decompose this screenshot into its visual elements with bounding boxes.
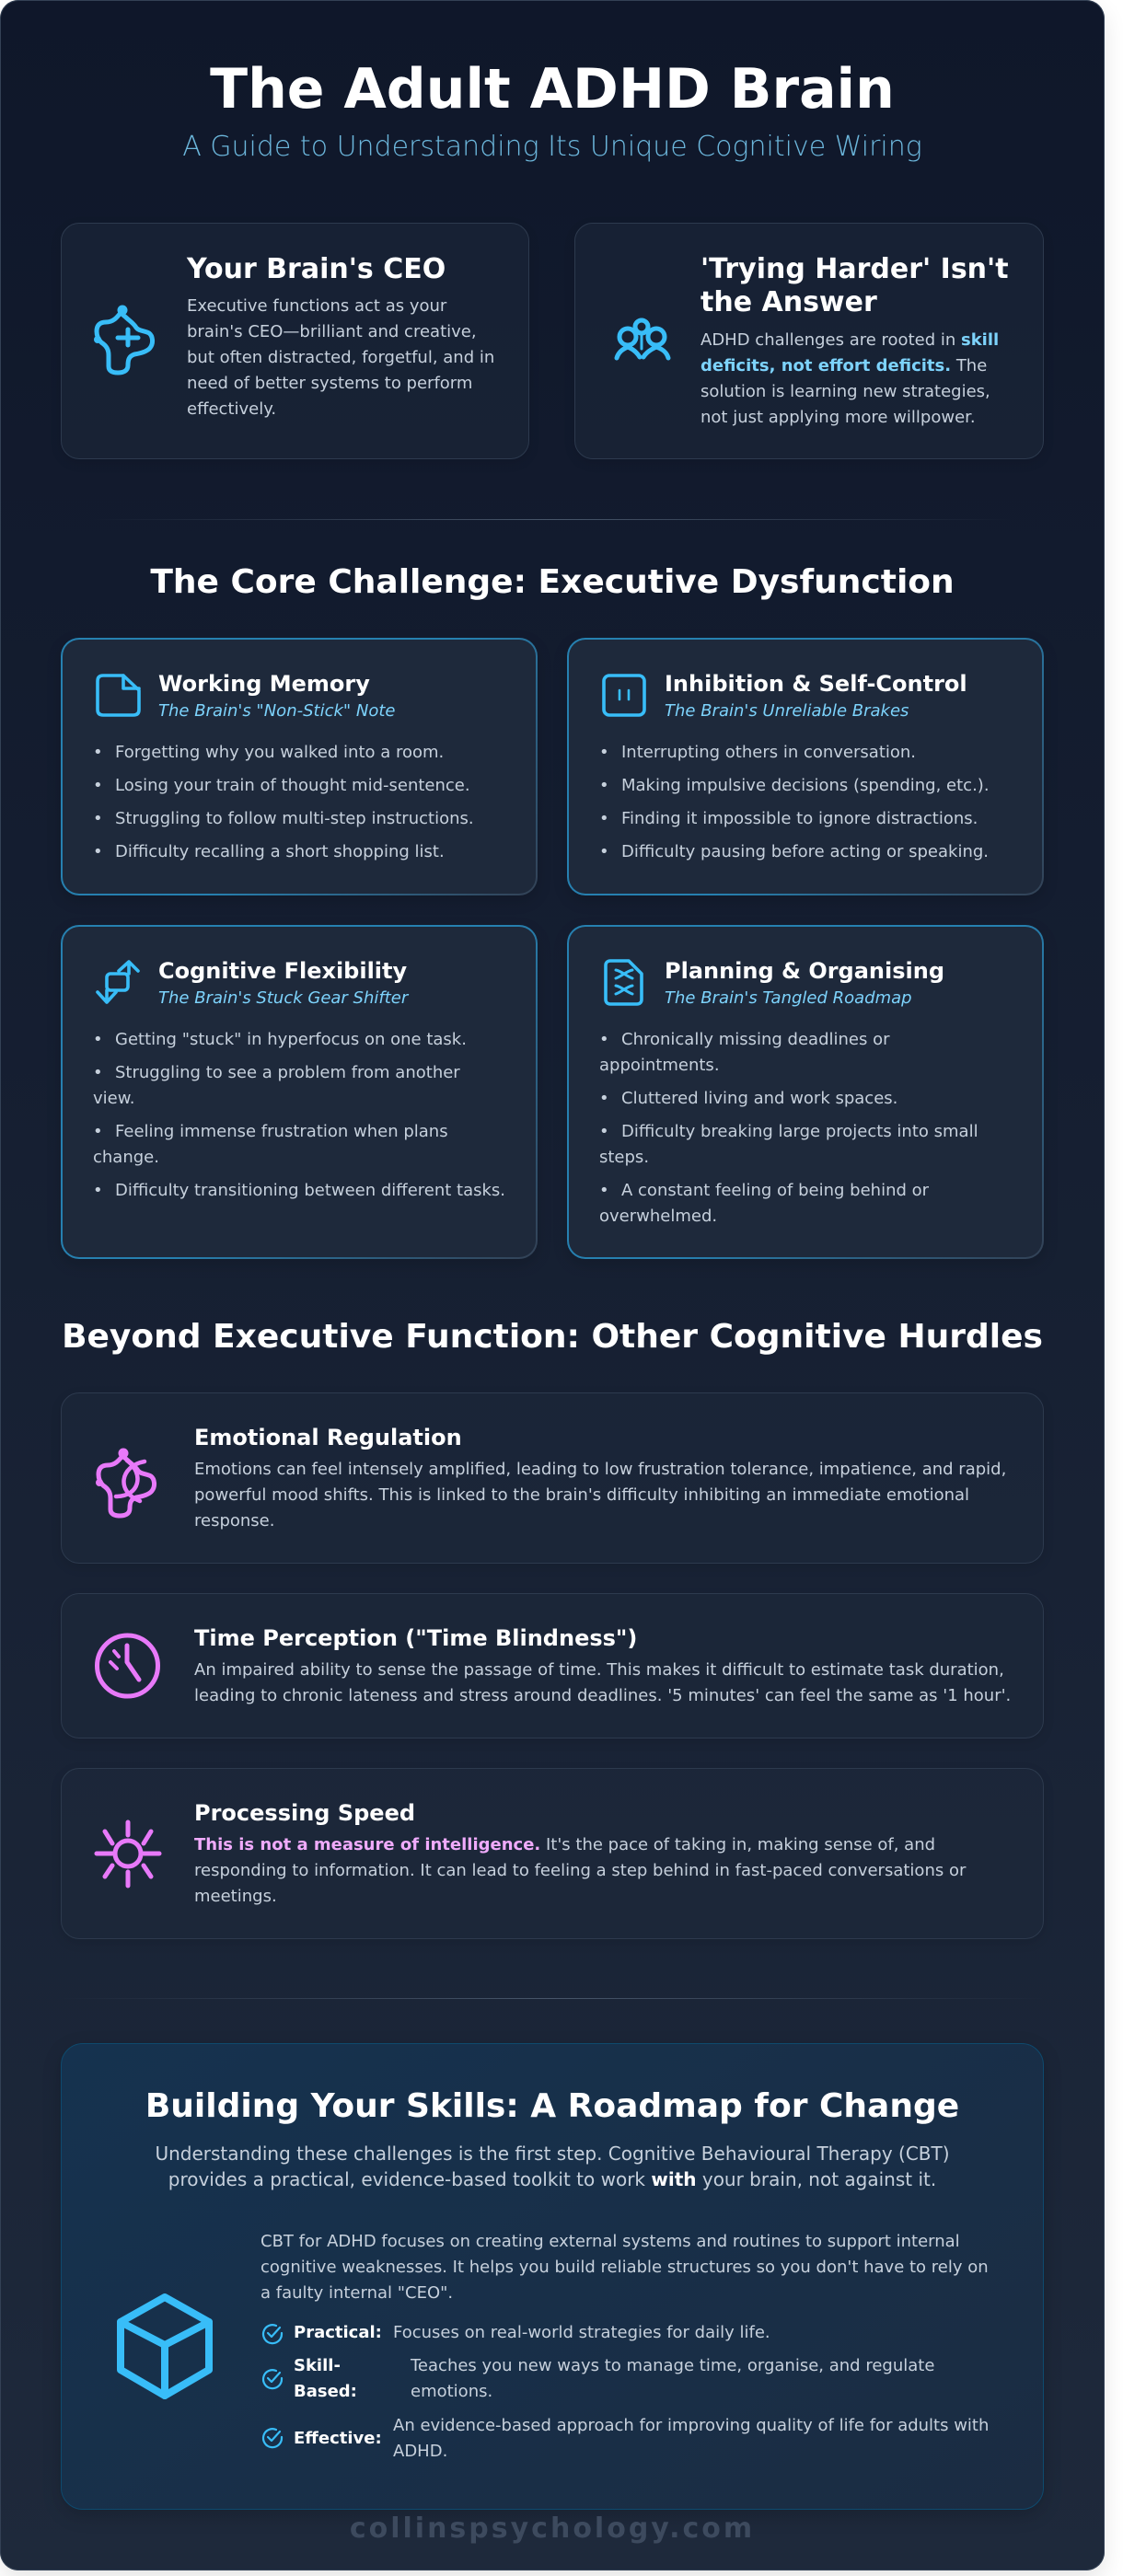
card text: need of better systems to perform <box>187 374 472 393</box>
divider <box>60 1998 1045 1999</box>
body text: CBT for ADHD focuses on creating external systems and routines to support internal <box>260 2232 960 2251</box>
card text: responding to information. It can lead to feeling a step behind in fast-paced conversations or <box>194 1861 966 1880</box>
card subheading: The Brain's Stuck Gear Shifter <box>158 988 408 1008</box>
panel intro <box>155 2143 950 2190</box>
label: Based: <box>294 2382 357 2401</box>
card text: ADHD challenges are rooted in skill <box>700 330 999 350</box>
card heading: Inhibition & Self-Control <box>665 671 967 697</box>
card heading: 'Trying Harder' Isn't <box>700 253 1009 285</box>
description: Focuses on real-world strategies for daily life. <box>393 2323 770 2342</box>
symptom list: steps. <box>599 1148 649 1167</box>
card text <box>187 296 494 419</box>
symptom list: A constant feeling of being behind or <box>621 1181 929 1200</box>
panel intro: Understanding these challenges is the first step. Cognitive Behavioural Therapy (CBT) <box>155 2143 950 2165</box>
symptom list: Getting "stuck" in hyperfocus on one task. <box>115 1030 467 1049</box>
symptom list <box>602 743 990 861</box>
description: Teaches you new ways to manage time, organise, and regulate <box>411 2356 934 2375</box>
symptom list: Finding it impossible to ignore distractions. <box>621 809 978 828</box>
icon: brain with lens <box>96 1449 156 1519</box>
label: Skill- <box>294 2356 341 2375</box>
icon: clock <box>95 1633 160 1699</box>
panel: time perception <box>61 1593 1044 1739</box>
symptom list: appointments. <box>599 1056 720 1075</box>
icon: cube <box>117 2293 213 2399</box>
panel: emotional regulation <box>61 1392 1044 1564</box>
icon: check <box>261 2369 284 2389</box>
icon: pause button <box>602 674 646 717</box>
card heading: Your Brain's CEO <box>187 253 446 285</box>
card heading: Emotional Regulation <box>194 1425 462 1450</box>
icon: three people <box>615 318 670 361</box>
benefit: effective <box>261 2416 989 2461</box>
description: emotions. <box>411 2382 492 2401</box>
symptom list: Struggling to follow multi-step instructions. <box>115 809 474 828</box>
symptom list: Difficulty transitioning between different tasks. <box>115 1181 505 1200</box>
card text: deficits, not effort deficits. The <box>700 356 987 375</box>
symptom list: overwhelmed. <box>599 1207 717 1226</box>
card text: An impaired ability to sense the passage of time. This makes it difficult to estimate task duration, <box>194 1660 1004 1680</box>
card text: Emotions can feel intensely amplified, leading to low frustration tolerance, impatience, and rapid, <box>194 1460 1006 1479</box>
symptom list <box>93 1030 505 1200</box>
card heading: Processing Speed <box>194 1800 415 1826</box>
symptom list: Cluttered living and work spaces. <box>621 1089 897 1108</box>
card text: not just applying more willpower. <box>700 408 976 427</box>
panel: processing speed <box>61 1768 1044 1939</box>
card heading: Working Memory <box>158 671 370 697</box>
symptom list: Making impulsive decisions (spending, etc.). <box>621 776 990 795</box>
card text: powerful mood shifts. This is linked to the brain's difficulty inhibiting an immediate emotional <box>194 1485 969 1505</box>
card text <box>700 330 999 427</box>
card subheading: The Brain's "Non-Stick" Note <box>158 701 396 721</box>
panel heading: Building Your Skills: A Roadmap for Change <box>145 2087 959 2125</box>
description <box>411 2356 934 2401</box>
card text: leading to chronic lateness and stress around deadlines. '5 minutes' can feel the same as '1 hour'. <box>194 1686 1011 1705</box>
subtitle: A Guide to Understanding Its Unique Cognitive Wiring <box>182 131 922 163</box>
card text: Executive functions act as your <box>187 296 446 316</box>
card text: but often distracted, forgetful, and in <box>187 348 494 367</box>
symptom list: Struggling to see a problem from another <box>115 1063 460 1082</box>
card text: response. <box>194 1511 274 1531</box>
body text <box>260 2232 989 2303</box>
card text <box>194 1835 967 1906</box>
symptom list: view. <box>93 1089 135 1108</box>
panel: working memory <box>61 638 538 895</box>
icon: sun <box>94 1820 162 1889</box>
card text: brain's CEO—brilliant and creative, <box>187 322 477 341</box>
card text <box>194 1660 1011 1705</box>
label: Effective: <box>294 2429 382 2448</box>
label: Practical: <box>294 2323 382 2342</box>
card heading: the Answer <box>700 286 877 318</box>
panel: building your skills <box>61 2043 1044 2510</box>
panel: cognitive flexibility <box>61 925 538 1259</box>
panel: trying harder <box>574 223 1044 459</box>
symptom list: Difficulty recalling a short shopping list. <box>115 842 445 861</box>
icon: swap arrows <box>96 960 140 1004</box>
panel: inhibition <box>567 638 1044 895</box>
symptom list: change. <box>93 1148 159 1167</box>
description: ADHD. <box>393 2442 447 2461</box>
icon: brain with plus <box>94 306 155 375</box>
body text: a faulty internal "CEO". <box>260 2283 453 2303</box>
benefit: skill-based <box>261 2356 934 2401</box>
title: The Adult ADHD Brain <box>210 57 895 121</box>
icon: check <box>261 2428 284 2448</box>
card text: effectively. <box>187 399 276 419</box>
card text: This is not a measure of intelligence. It's the pace of taking in, making sense of, and <box>194 1835 935 1854</box>
card text <box>194 1460 1006 1531</box>
card subheading: The Brain's Tangled Roadmap <box>665 988 912 1008</box>
card heading <box>700 253 1009 318</box>
card heading: Time Perception ("Time Blindness") <box>194 1625 637 1651</box>
watermark: collinspsychology.com <box>350 2512 755 2545</box>
symptom list: Difficulty breaking large projects into small <box>621 1122 978 1141</box>
card heading: Planning & Organising <box>665 958 944 984</box>
card subheading: The Brain's Unreliable Brakes <box>665 701 909 721</box>
benefit: practical <box>261 2323 770 2345</box>
card text: solution is learning new strategies, <box>700 382 990 401</box>
card heading: Cognitive Flexibility <box>158 958 407 984</box>
symptom list: Forgetting why you walked into a room. <box>115 743 444 762</box>
label <box>294 2356 357 2401</box>
divider <box>92 519 1013 520</box>
symptom list: Interrupting others in conversation. <box>621 743 916 762</box>
symptom list: Chronically missing deadlines or <box>621 1030 890 1049</box>
symptom list <box>599 1030 978 1226</box>
panel: your brain's CEO <box>61 223 529 459</box>
panel: planning <box>567 925 1044 1259</box>
icon: tangled document <box>604 959 643 1006</box>
description <box>393 2416 989 2461</box>
symptom list: Difficulty pausing before acting or speaking. <box>621 842 989 861</box>
body text: cognitive weaknesses. It helps you build reliable structures so you don't have to rely on <box>260 2258 989 2277</box>
section heading: beyond executive function: Beyond Executive Function: Other Cognitive Hurdles <box>62 1318 1043 1356</box>
symptom list <box>96 743 474 861</box>
card text: meetings. <box>194 1887 277 1906</box>
icon: check <box>261 2324 284 2345</box>
description: An evidence-based approach for improving quality of life for adults with <box>393 2416 989 2435</box>
symptom list: Losing your train of thought mid-sentence. <box>115 776 470 795</box>
icon: document <box>96 674 141 717</box>
panel intro: provides a practical, evidence-based toolkit to work with your brain, not against it. <box>168 2168 936 2190</box>
section heading: core challenge: The Core Challenge: Executive Dysfunction <box>150 563 955 601</box>
symptom list: Feeling immense frustration when plans <box>115 1122 448 1141</box>
